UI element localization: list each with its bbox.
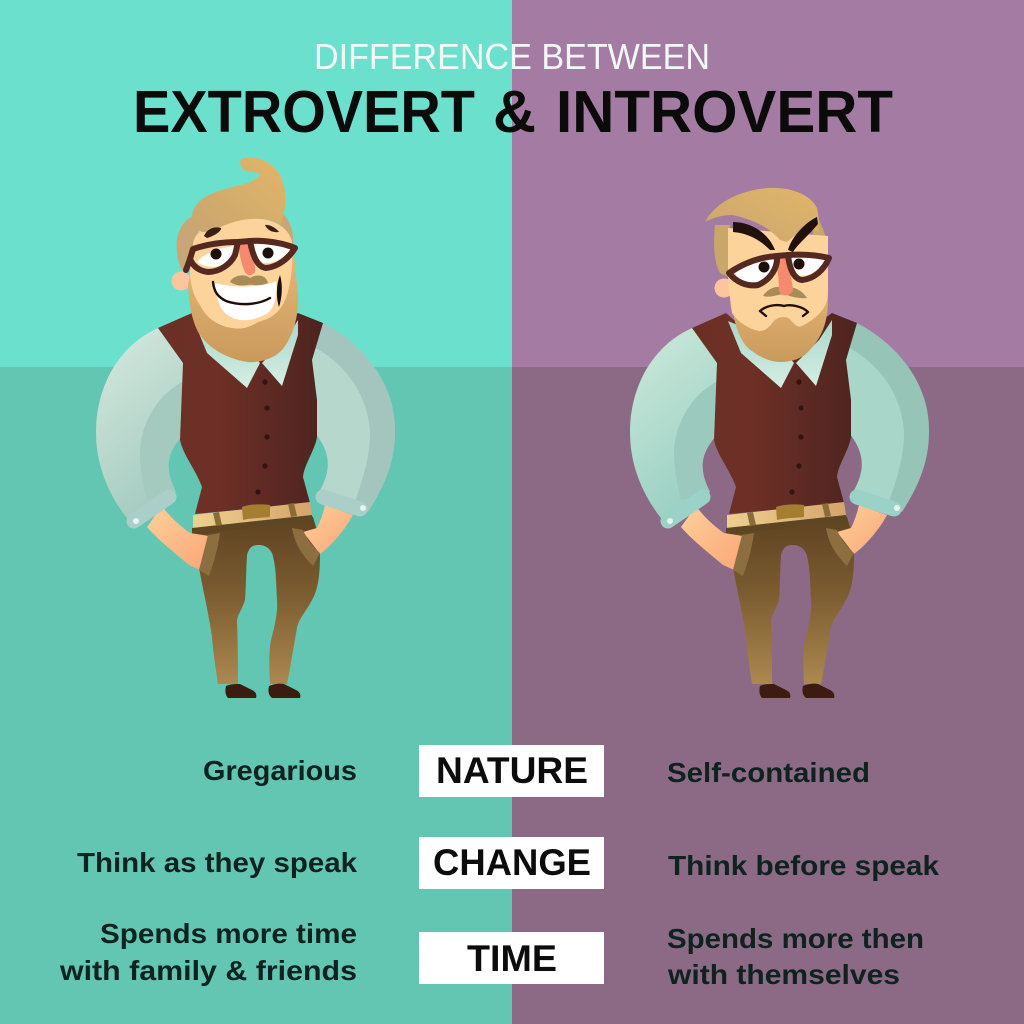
introvert time text: Spends more then — [667, 923, 924, 954]
label: nature — [419, 745, 604, 797]
trousers — [192, 517, 320, 684]
background: extrovert panel top — [0, 0, 512, 367]
moustache — [230, 275, 268, 286]
time word: TIME — [467, 938, 557, 979]
title: INTROVERT — [556, 79, 893, 145]
time box — [419, 932, 604, 984]
nose — [777, 257, 793, 296]
introvert character — [630, 188, 929, 698]
eyes — [197, 246, 235, 267]
extrovert change text: Think as they speak — [77, 847, 357, 878]
smile — [215, 281, 277, 320]
sleeves — [630, 323, 929, 522]
introvert change text: Think before speak — [668, 850, 939, 881]
hair quiff — [192, 157, 285, 232]
face — [190, 217, 292, 329]
frown — [760, 305, 808, 316]
shoes — [759, 684, 834, 698]
shirt collar — [728, 320, 832, 388]
introvert time text — [667, 923, 924, 990]
background: introvert panel top — [512, 0, 1024, 367]
shirt collar — [194, 320, 298, 388]
pockets — [733, 528, 854, 576]
cuffs — [667, 497, 900, 524]
extrovert time text — [59, 918, 357, 986]
back hair — [177, 217, 202, 272]
glasses — [186, 241, 295, 272]
cuffs — [133, 497, 366, 524]
label: change — [419, 837, 604, 889]
vest — [158, 313, 323, 514]
belt — [192, 502, 313, 535]
glasses — [729, 255, 829, 285]
background: extrovert panel bottom — [0, 367, 512, 1024]
introvert nature text: Self-contained — [667, 757, 870, 788]
moustache — [763, 287, 807, 298]
beard — [188, 255, 298, 362]
ear — [714, 278, 734, 298]
extrovert head — [172, 157, 298, 362]
ear — [172, 272, 190, 290]
nature box — [419, 745, 604, 797]
background: introvert panel bottom — [512, 367, 1024, 1024]
face — [728, 228, 828, 331]
extrovert character — [96, 157, 395, 698]
back hair — [714, 225, 730, 277]
introvert time text: with themselves — [667, 959, 900, 990]
subtitle: DIFFERENCE BETWEEN — [314, 36, 710, 77]
pockets — [199, 528, 320, 576]
eyebrows — [204, 227, 221, 238]
eyes — [735, 257, 776, 283]
shoes — [225, 684, 300, 698]
nose — [238, 242, 255, 275]
hair top — [705, 188, 819, 242]
hands — [147, 505, 353, 570]
extrovert nature text: Gregarious — [203, 755, 357, 786]
extrovert time text: Spends more time — [100, 918, 357, 949]
title — [133, 79, 893, 145]
hands — [681, 505, 887, 570]
belt — [726, 502, 847, 535]
beard — [732, 280, 828, 362]
extrovert time text: with family & friends — [59, 955, 357, 986]
title: & — [493, 79, 536, 145]
introvert head — [705, 188, 829, 362]
change box — [419, 837, 604, 889]
vest — [692, 313, 857, 514]
nature word: NATURE — [436, 750, 588, 791]
sleeves — [96, 323, 395, 522]
title: EXTROVERT — [133, 79, 475, 145]
change word: CHANGE — [433, 842, 591, 883]
eyebrows — [733, 222, 775, 250]
trousers — [726, 517, 854, 684]
label: time — [419, 932, 604, 984]
